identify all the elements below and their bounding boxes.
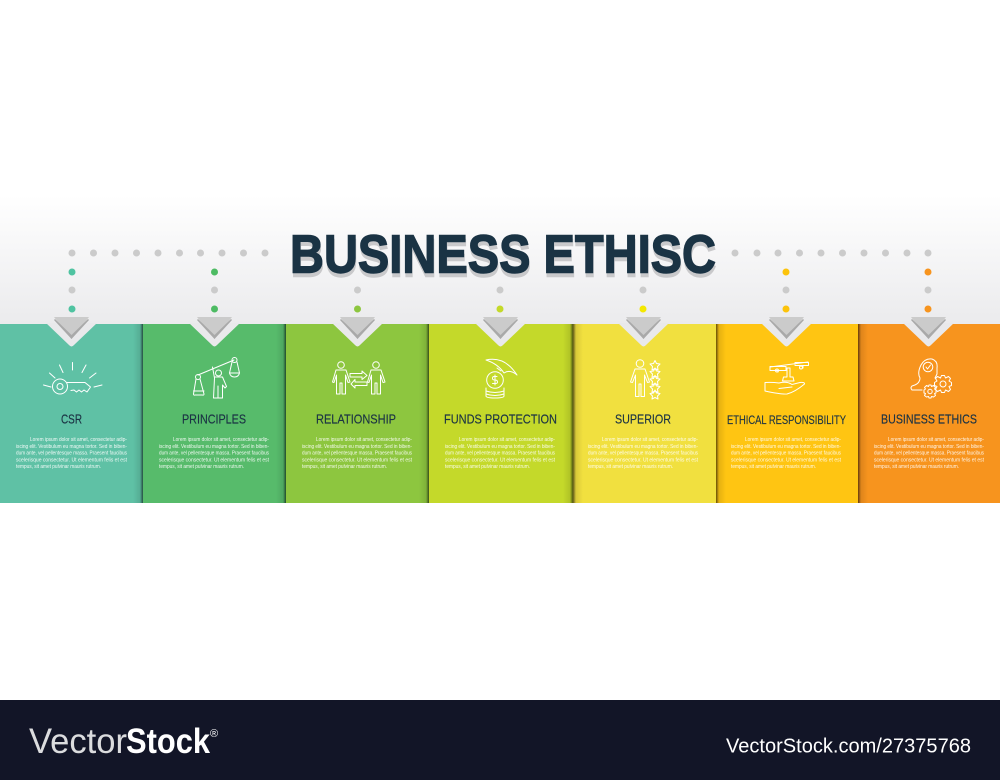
label: Business Ethics: BUSINESS ETHICS <box>881 412 977 426</box>
label: Superior: SUPERIOR <box>615 412 671 426</box>
text block: Funds Protection: Lorem ipsum dolor sit amet, consectetur adip- <box>459 437 555 443</box>
arrow: CSR <box>46 317 97 346</box>
arrow: Principles <box>189 317 240 346</box>
arrow: Funds Protection <box>475 317 526 346</box>
text block: Superior: dum ante, vel pellentesque massa. Praesent faucibus <box>588 450 698 456</box>
text block: Relationship: Lorem ipsum dolor sit amet, consectetur adip- <box>316 437 412 443</box>
text block: CSR: Lorem ipsum dolor sit amet, consectetur adip- <box>30 437 127 443</box>
text block: Superior: Lorem ipsum dolor sit amet, consectetur adip- <box>602 437 698 443</box>
dotted connectors <box>68 250 932 312</box>
text block: Ethical Responsibility: tempus, sit amet pulvinar mauris rutrum. <box>731 464 816 470</box>
text block: Principles: Lorem ipsum dolor sit amet, consectetur adip- <box>173 437 269 443</box>
text block: CSR: iscing elit. Vestibulum eu magna tortor. Sed in biben- <box>16 444 127 450</box>
text block: Ethical Responsibility: iscing elit. Vestibulum eu magna tortor. Sed in biben- <box>731 444 841 450</box>
text block: Ethical Responsibility: dum ante, vel pellentesque massa. Praesent faucibus <box>731 450 841 456</box>
footer logo: ® <box>210 728 218 740</box>
text block: Superior: iscing elit. Vestibulum eu magna tortor. Sed in biben- <box>588 444 698 450</box>
footer logo: Stock <box>126 722 210 761</box>
text block: CSR: tempus, sit amet pulvinar mauris rutrum. <box>16 464 101 470</box>
text block: Funds Protection <box>445 437 555 470</box>
arrow: Relationship <box>332 317 383 346</box>
text block: Relationship: dum ante, vel pellentesque massa. Praesent faucibus <box>302 450 412 456</box>
label: Principles: PRINCIPLES <box>182 412 246 426</box>
text block: Principles <box>159 437 269 470</box>
panel: Principles <box>143 324 286 503</box>
panel: Superior <box>573 324 716 503</box>
text block: Principles: scelerisque consectetur. Ut elementum felis et est <box>159 458 269 464</box>
text block: Superior <box>588 437 698 470</box>
text block: Business Ethics: Lorem ipsum dolor sit amet, consectetur adip- <box>888 437 984 443</box>
icon: hand with scales <box>765 362 808 394</box>
panel: Relationship <box>286 324 429 503</box>
arrow: Superior <box>618 317 669 346</box>
text block: Funds Protection: dum ante, vel pellentesque massa. Praesent faucibus <box>445 450 555 456</box>
text block: Funds Protection: iscing elit. Vestibulum eu magna tortor. Sed in biben- <box>445 444 555 450</box>
text block: Principles: iscing elit. Vestibulum eu magna tortor. Sed in biben- <box>159 444 269 450</box>
panel: Business Ethics <box>858 324 1000 503</box>
panel: Ethical Responsibility <box>716 324 858 503</box>
text block: Business Ethics: tempus, sit amet pulvinar mauris rutrum. <box>874 464 959 470</box>
text block: Relationship: iscing elit. Vestibulum eu magna tortor. Sed in biben- <box>302 444 412 450</box>
title: BUSINESS ETHISC <box>290 225 716 285</box>
icon: scales and person <box>194 358 240 398</box>
label: Funds Protection: FUNDS PROTECTION <box>444 412 557 426</box>
text block: Business Ethics: iscing elit. Vestibulum eu magna tortor. Sed in biben- <box>874 444 984 450</box>
label: CSR: CSR <box>61 412 82 426</box>
text block: Relationship <box>302 437 412 470</box>
icon: head with gears <box>911 359 952 398</box>
header band background <box>0 195 1000 324</box>
arrow: Ethical Responsibility <box>761 317 812 346</box>
text block: Relationship: scelerisque consectetur. Ut elementum felis et est <box>302 458 412 464</box>
text block: Ethical Responsibility: scelerisque consectetur. Ut elementum felis et est <box>731 458 841 464</box>
text block: Superior: scelerisque consectetur. Ut elementum felis et est <box>588 458 698 464</box>
text block: Ethical Responsibility <box>731 437 841 470</box>
panel: CSR <box>0 324 143 503</box>
text block: CSR: scelerisque consectetur. Ut elementum felis et est <box>16 458 127 464</box>
label: Relationship: RELATIONSHIP <box>316 412 396 426</box>
icon: key <box>44 362 102 394</box>
icon: person with stars <box>630 360 660 399</box>
text block: Superior: tempus, sit amet pulvinar mauris rutrum. <box>588 464 673 470</box>
icon: umbrella and coins <box>486 359 517 398</box>
text block: Funds Protection: scelerisque consectetur. Ut elementum felis et est <box>445 458 555 464</box>
footer id text: VectorStock.com/27375768 <box>726 736 971 758</box>
title: BUSINESS ETHISC <box>290 228 716 288</box>
panel: Funds Protection <box>429 324 573 503</box>
footer bar <box>0 700 1000 780</box>
text block: Ethical Responsibility: Lorem ipsum dolor sit amet, consectetur adip- <box>745 437 841 443</box>
text block: CSR: dum ante, vel pellentesque massa. Praesent faucibus <box>16 450 127 456</box>
text block: Principles: dum ante, vel pellentesque massa. Praesent faucibus <box>159 450 269 456</box>
text block: Principles: tempus, sit amet pulvinar mauris rutrum. <box>159 464 244 470</box>
text block: Relationship: tempus, sit amet pulvinar mauris rutrum. <box>302 464 387 470</box>
arrow: Business Ethics <box>903 317 954 346</box>
label: Ethical Responsibility: ETHICAL RESPONSIBILITY <box>727 413 846 427</box>
footer logo <box>29 722 218 761</box>
text block: Funds Protection: tempus, sit amet pulvinar mauris rutrum. <box>445 464 530 470</box>
footer logo: Vector <box>29 722 127 761</box>
text block: CSR <box>16 437 127 470</box>
text block: Business Ethics <box>874 437 984 470</box>
icon: two people exchanging <box>332 362 385 394</box>
text block: Business Ethics: scelerisque consectetur. Ut elementum felis et est <box>874 458 984 464</box>
